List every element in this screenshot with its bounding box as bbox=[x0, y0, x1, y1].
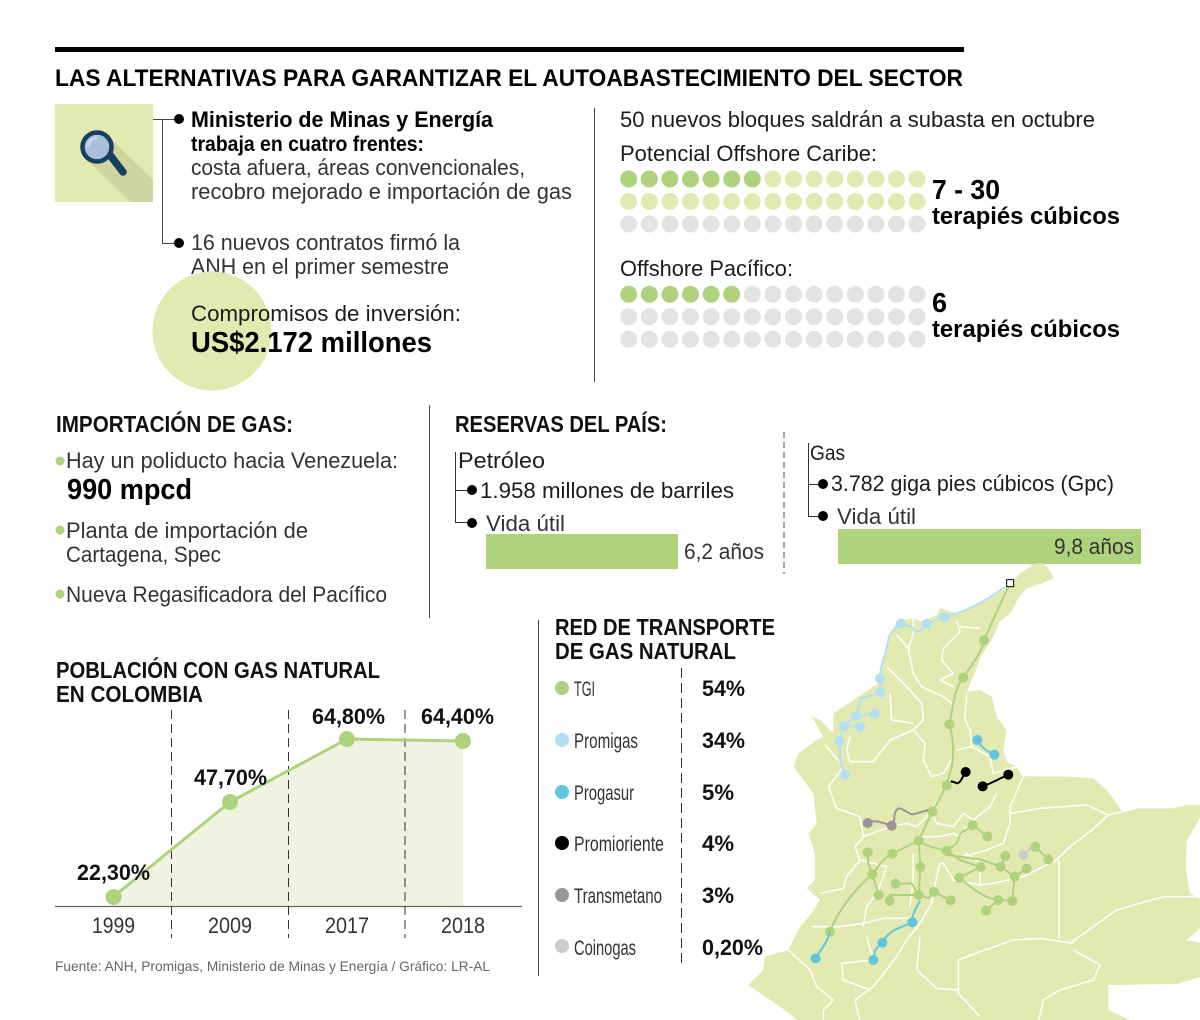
legend: TGI bbox=[555, 676, 745, 701]
legend: Progasur: 5% bbox=[702, 780, 734, 805]
title: LAS ALTERNATIVAS PARA GARANTIZAR EL AUTOABASTECIMIENTO DEL SECTOR bbox=[55, 65, 963, 92]
value: caribe: terapiés cúbicos bbox=[932, 203, 1120, 230]
area chart: 2009 bbox=[208, 913, 252, 938]
text: inversion bbox=[191, 301, 461, 359]
bar: gas bbox=[838, 529, 1141, 564]
pipeline: Promioriente bbox=[951, 767, 1013, 791]
heading: poblacion: POBLACIÓN CON GAS NATURAL bbox=[56, 656, 380, 683]
petroleo block bbox=[456, 448, 734, 536]
value: caribe: 7 - 30 bbox=[932, 174, 1000, 205]
pipeline: Coinogas bbox=[1018, 847, 1032, 860]
panel: ministerio bbox=[55, 104, 572, 390]
area chart: 47,70% bbox=[194, 765, 267, 790]
value: pacifico bbox=[932, 287, 1120, 343]
bar: petroleo bbox=[486, 534, 764, 569]
heading: poblacion bbox=[56, 656, 380, 707]
connector lines bbox=[153, 114, 184, 248]
item: planta: Planta de importación de bbox=[66, 518, 308, 543]
heading: importacion: IMPORTACIÓN DE GAS: bbox=[56, 410, 293, 437]
panel: offshore bbox=[620, 107, 1120, 348]
value: pacifico: terapiés cúbicos bbox=[932, 316, 1120, 343]
marker: origin square bbox=[1007, 580, 1014, 587]
bar: gas: 9,8 años bbox=[1054, 534, 1134, 559]
legend: Coinogas bbox=[555, 935, 763, 960]
text: ministerio bbox=[191, 107, 572, 204]
pipeline: TGI bbox=[825, 587, 1053, 937]
text: contratos: ANH en el primer semestre bbox=[191, 254, 449, 279]
pipeline: Promigas bbox=[834, 587, 1005, 780]
legend: Promioriente bbox=[555, 831, 734, 856]
gas block: Vida útil bbox=[837, 504, 916, 529]
value: caribe bbox=[932, 174, 1120, 230]
legend: Promigas bbox=[555, 728, 745, 753]
source: Fuente: ANH, Promigas, Ministerio de Minas y Energía / Gráfico: LR-AL bbox=[55, 958, 490, 974]
legend: Coinogas: 0,20% bbox=[702, 935, 763, 960]
gas block bbox=[808, 442, 1114, 529]
petroleo block: Vida útil bbox=[486, 511, 565, 536]
text: ministerio: Ministerio de Minas y Energía bbox=[191, 107, 494, 132]
legend: Progasur bbox=[555, 780, 734, 805]
text: ministerio: recobro mejorado e importación de gas bbox=[191, 179, 572, 204]
area chart: 2017 bbox=[325, 913, 369, 938]
heading: poblacion: EN COLOMBIA bbox=[56, 681, 203, 707]
legend: TGI: TGI bbox=[574, 678, 595, 701]
legend: Promioriente: Promioriente bbox=[574, 833, 664, 856]
area chart: 64,80% bbox=[312, 704, 385, 729]
gas block: Gas bbox=[810, 442, 845, 465]
heading: red de transporte: DE GAS NATURAL bbox=[555, 638, 736, 664]
gas block: 3.782 giga pies cúbicos (Gpc) bbox=[831, 471, 1114, 496]
decorative circle bbox=[152, 272, 272, 390]
text: inversion: Compromisos de inversión: bbox=[191, 301, 461, 326]
text: inversion: US$2.172 millones bbox=[191, 327, 432, 359]
pipeline: Transmetano bbox=[863, 808, 928, 831]
area chart bbox=[55, 704, 522, 938]
text: contratos bbox=[191, 230, 461, 279]
dot matrix: pacifico bbox=[620, 286, 926, 348]
item: regasificadora: Nueva Regasificadora del Pacífico bbox=[66, 582, 387, 607]
petroleo block: 1.958 millones de barriles bbox=[480, 478, 734, 503]
pipeline: Progasur bbox=[811, 735, 999, 965]
heading: red de transporte bbox=[555, 614, 775, 664]
item: poliducto: Hay un poliducto hacia Venezuela: bbox=[66, 448, 398, 473]
item: poliducto: 990 mpcd bbox=[67, 474, 192, 506]
icon: magnifying glass bbox=[55, 104, 153, 202]
map: colombia gas network bbox=[748, 563, 1200, 1020]
legend: Promigas: 34% bbox=[702, 728, 745, 753]
item: planta bbox=[56, 518, 308, 567]
area chart: 22,30% bbox=[77, 860, 150, 885]
legend: Promioriente: 4% bbox=[702, 831, 734, 856]
dot matrix: caribe bbox=[620, 170, 926, 232]
area chart: 64,40% bbox=[421, 704, 494, 729]
legend: Transmetano bbox=[555, 883, 734, 908]
legend: TGI: 54% bbox=[702, 676, 745, 701]
text: bloques: 50 nuevos bloques saldrán a subasta en octubre bbox=[620, 107, 1095, 132]
heading: caribe: Potencial Offshore Caribe: bbox=[620, 141, 877, 166]
text: ministerio: trabaja en cuatro frentes: bbox=[191, 133, 424, 156]
item: poliducto bbox=[56, 448, 398, 506]
area chart: 2018 bbox=[441, 913, 485, 938]
top rule bbox=[55, 47, 964, 52]
legend: Progasur: Progasur bbox=[574, 782, 634, 805]
legend: Transmetano: 3% bbox=[702, 883, 734, 908]
text: contratos: 16 nuevos contratos firmó la bbox=[191, 230, 461, 255]
map land bbox=[748, 563, 1200, 1020]
heading: red de transporte: RED DE TRANSPORTE bbox=[555, 614, 775, 640]
panel: red de transporte legend bbox=[555, 614, 775, 968]
value: pacifico: 6 bbox=[932, 287, 947, 318]
panel: importacion de gas bbox=[56, 410, 398, 607]
panel: poblacion con gas natural bbox=[55, 656, 522, 974]
legend: Promigas: Promigas bbox=[574, 730, 638, 753]
text: ministerio: costa afuera, áreas convencionales, bbox=[191, 155, 525, 180]
panel: reservas del pais bbox=[455, 410, 1141, 574]
legend: Transmetano: Transmetano bbox=[574, 885, 662, 908]
heading: pacifico: Offshore Pacífico: bbox=[620, 256, 793, 281]
item: planta: Cartagena, Spec bbox=[66, 542, 221, 567]
area chart: 1999 bbox=[92, 913, 135, 938]
department borders bbox=[788, 618, 1200, 1020]
bar: petroleo: 6,2 años bbox=[684, 539, 764, 564]
petroleo block: Petróleo bbox=[458, 448, 545, 473]
legend: Coinogas: Coinogas bbox=[574, 937, 636, 960]
heading: reservas: RESERVAS DEL PAÍS: bbox=[455, 410, 667, 437]
